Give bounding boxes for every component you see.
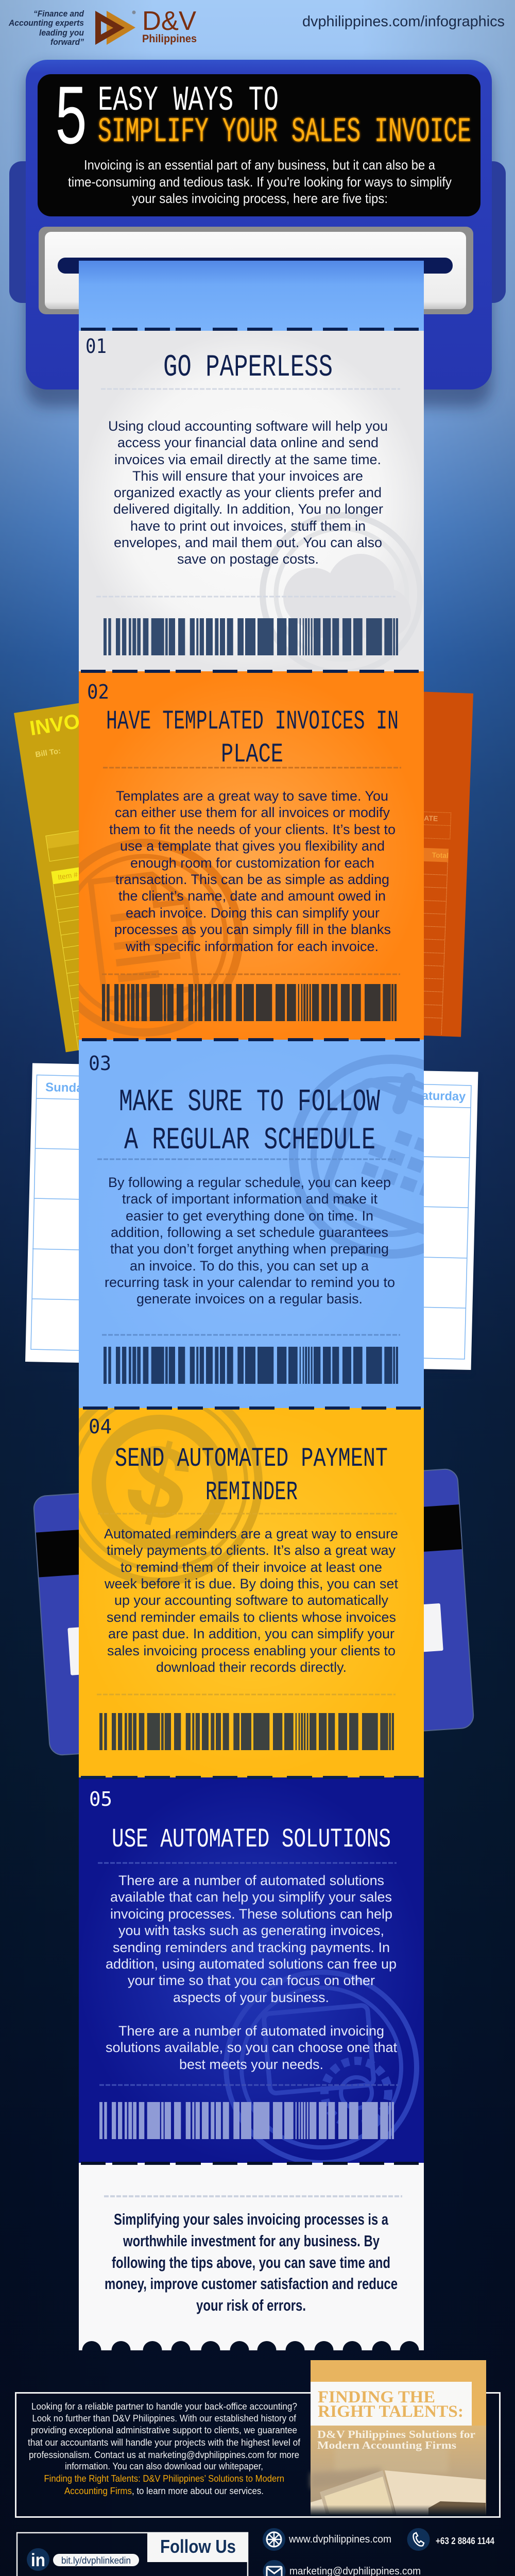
printer tray — [39, 227, 473, 314]
tip heading: HAVE TEMPLATED INVOICES IN — [106, 706, 399, 737]
promo text: that our accountants will handle your projects with the highest level of — [28, 2437, 301, 2448]
logo: D&V Philippines — [95, 6, 197, 45]
tip body text: sales invoicing process enabling your clients to — [107, 1643, 396, 1658]
promo text: professionalism. Contact us at marketing@dvphilippines.com for more — [29, 2450, 299, 2460]
tip body text: By following a regular schedule, you can keep — [108, 1175, 391, 1190]
tip body text: best meets your needs. — [179, 2057, 323, 2072]
intro text: your sales invoicing process, here are five tips: — [132, 191, 388, 206]
tip heading — [115, 1444, 388, 1507]
footer: contact website: www.dvphilippines.com — [288, 2534, 391, 2545]
conclusion text: Simplifying your sales invoicing processes is a — [114, 2210, 389, 2228]
footer: whitepaper book cover: RIGHT TALENTS: — [318, 2402, 464, 2421]
tip body text: aspects of your business. — [173, 1990, 329, 2005]
tip body text — [105, 1175, 395, 1307]
promo text: Look no further than D&V Philippines. With our established history of — [32, 2413, 297, 2424]
tip body text: week before it is due. By doing this, you can set — [104, 1576, 398, 1591]
tip heading: REMINDER — [205, 1477, 298, 1507]
tip 1 panel: go paperless — [79, 331, 424, 673]
tip body text — [109, 788, 396, 954]
follow us heading: Follow Us — [160, 2536, 236, 2557]
tip body text: you with tasks such as generating invoices, — [118, 1923, 384, 1938]
barcode — [102, 984, 397, 1021]
tip body text: timely payments to clients. It’s also a great way — [107, 1543, 396, 1558]
tip body text: each invoice. Doing this can simplify your — [126, 905, 380, 921]
title line 1: EASY WAYS TO — [98, 81, 279, 121]
footer: promo box — [15, 2393, 500, 2517]
tip body text: that you don’t forget anything when preparing — [110, 1241, 389, 1257]
tip heading: PLACE — [221, 739, 283, 770]
tip heading: USE AUTOMATED SOLUTIONS — [112, 1824, 391, 1855]
watermark: monitor and gear icon — [226, 1972, 417, 2163]
intro text: Invoicing is an essential part of any business, but it can also be a — [84, 157, 435, 173]
calendar sheet behind tip 3: Saturday — [414, 1089, 466, 1104]
promo text: Looking for a reliable partner to handle your back-office accounting? — [31, 2401, 297, 2412]
header: tagline: Accounting experts — [8, 18, 84, 28]
conclusion text: worthwhile investment for any business. By — [123, 2232, 380, 2250]
tip body text: them to fit the needs of your clients. It’s best to — [109, 822, 396, 837]
tip body text — [106, 1873, 397, 2072]
yellow invoice sheet behind tip 2: Bill To: — [35, 747, 61, 759]
tip body text: to remind them of their invoice at least one — [121, 1560, 382, 1575]
promo text — [28, 2401, 301, 2496]
footer: follow us box — [17, 2532, 248, 2576]
tip body text: processes as you can simply fill in the blanks — [114, 922, 391, 937]
tip body text: have to print out invoices, stuff them in — [130, 518, 366, 534]
tip body text: up your accounting software to automatically — [114, 1592, 388, 1608]
tip body text: organized exactly as your clients prefer and — [114, 485, 382, 500]
conclusion text: money, improve customer satisfaction and reduce — [105, 2275, 398, 2293]
tip body text: available that can help you simplify your sales — [110, 1889, 392, 1905]
tip body text: save on postage costs. — [177, 551, 319, 567]
footer: contact email — [263, 2560, 421, 2576]
tip body text: the client’s name, date and amount owed in — [118, 888, 386, 904]
intro text — [68, 157, 452, 206]
header: tagline: “Finance and — [33, 9, 84, 19]
tip body text: sending reminders and tracking payments. In — [113, 1940, 390, 1955]
tip heading: A REGULAR SCHEDULE — [124, 1123, 375, 1158]
book subtitle: D&V Philippines Solutions for — [317, 2428, 475, 2441]
header: tagline: forward” — [50, 37, 84, 47]
tip body text: can either use them for all invoices or modify — [115, 805, 390, 820]
barcode — [99, 1713, 394, 1750]
tip body text: access your financial data online and send — [117, 435, 379, 450]
scalloped tear edge — [82, 2341, 419, 2350]
orange invoice sheet behind tip 2 — [322, 688, 473, 1037]
tip body text: send reminder emails to clients whose invoices — [107, 1609, 396, 1625]
tip body text: Templates are a great way to save time. You — [116, 788, 388, 804]
tip body text: download their records directly. — [156, 1659, 347, 1675]
footer: contact website — [263, 2528, 391, 2551]
tip 5 panel: automated solutions — [79, 1777, 424, 2163]
promo text: information. You can also download our whitepaper, — [65, 2461, 263, 2471]
tip body text: This will ensure that your invoices are — [132, 468, 363, 484]
header: tagline — [8, 9, 84, 47]
tip body text: your time so that you can focus on other — [128, 1973, 375, 1988]
tip body text: an invoice. To do this, you can set up a — [130, 1258, 369, 1274]
tip body text — [108, 418, 388, 567]
perforation dashes between panels — [81, 328, 421, 2165]
tip number: 04 — [89, 1415, 112, 1438]
promo text: , to learn more about our services. — [132, 2486, 264, 2496]
tip number: 01 — [85, 335, 107, 358]
logo: D&V Philippines: D&V — [142, 6, 196, 36]
paper roll: top blue end — [79, 261, 424, 331]
tip number: 02 — [87, 681, 109, 703]
tip heading: MAKE SURE TO FOLLOW — [119, 1085, 380, 1120]
tip heading: GO PAPERLESS — [163, 350, 333, 385]
tip body text: generate invoices on a regular basis. — [136, 1291, 363, 1307]
header: website url: dvphilippines.com/infographics — [302, 13, 505, 30]
tip number: 03 — [89, 1052, 111, 1075]
tip body text: Automated reminders are a great way to ensure — [104, 1526, 398, 1541]
tip body text: delivered digitally. In addition, You no longer — [113, 501, 383, 517]
tip body text: There are a number of automated solutions — [118, 1873, 384, 1888]
tip body text: invoices via email directly at the same time. — [114, 452, 381, 467]
icon: linkedin — [27, 2548, 49, 2571]
conclusion text: your risk of errors. — [196, 2296, 306, 2314]
tip body text: use a template that gives you flexibility and — [120, 838, 385, 854]
credit card behind tip 4 — [33, 1468, 474, 1756]
title number 5: 5 — [54, 72, 88, 169]
tip body text: recurring task in your calendar to remind you to — [105, 1275, 395, 1290]
promo text: Finding the Right Talents: D&V Philippines’ Solutions to Modern — [44, 2473, 284, 2484]
footer: whitepaper book cover: Modern Accounting Firms — [317, 2439, 456, 2451]
yellow invoice sheet behind tip 2 — [14, 682, 269, 1052]
tip 3 panel: regular schedule — [79, 1040, 424, 1408]
barcode — [99, 2102, 394, 2139]
printer machine — [9, 60, 506, 407]
header: tagline: leading you — [39, 28, 84, 38]
tip body text: invoicing processes. These solutions can help — [110, 1906, 392, 1922]
watermark: dollar coin icon — [79, 1408, 263, 1586]
tip body text: Using cloud accounting software will help you — [108, 418, 388, 434]
tip body text: envelopes, and mail them out. You can also — [114, 535, 382, 550]
calendar sheet behind tip 3 — [25, 1063, 478, 1374]
promo text: providing exceptional administrative support to clients, we guarantee — [31, 2425, 297, 2435]
conclusion panel — [79, 2163, 424, 2350]
footer: contact phone — [407, 2528, 494, 2551]
orange invoice sheet behind tip 2: DATE — [419, 814, 438, 823]
tip body text: easier to get everything done on time. In — [126, 1208, 373, 1224]
linkedin link pill: bit.ly/dvphlinkedin — [61, 2555, 131, 2566]
tip body text: solutions available, so you can choose one that — [106, 2040, 397, 2055]
tip body text: addition, following a set schedule guarantees — [111, 1225, 388, 1240]
intro text: time-consuming and tedious task. If you're looking for ways to simplify — [68, 174, 452, 190]
tip body text: with specific information for each invoice. — [125, 939, 379, 954]
tip body text: are past due. In addition, you can simplify your — [108, 1626, 394, 1641]
tip heading: SEND AUTOMATED PAYMENT — [115, 1444, 388, 1474]
barcode — [104, 1347, 398, 1384]
tip body text: addition, using automated solutions can free up — [106, 1956, 397, 1972]
tip heading — [119, 1085, 380, 1158]
tip heading — [106, 706, 399, 770]
watermark: cloud icon — [263, 515, 420, 673]
watermark: calendar icon — [289, 1055, 424, 1259]
tip 2 panel: templated invoices — [49, 671, 424, 1040]
tip body text — [104, 1526, 398, 1675]
tip body text: There are a number of automated invoicing — [118, 2023, 384, 2039]
tip body text: transaction. This can be as simple as adding — [115, 872, 389, 887]
barcode — [104, 618, 398, 655]
logo: D&V Philippines: Philippines — [142, 33, 197, 45]
conclusion text — [105, 2210, 398, 2314]
orange invoice sheet behind tip 2: Total — [432, 851, 449, 859]
tip body text: enough room for customization for each — [130, 855, 374, 871]
yellow invoice sheet behind tip 2: INVOICE — [28, 705, 115, 740]
tip number: 05 — [89, 1788, 112, 1810]
book title: FINDING THE — [318, 2388, 435, 2406]
watermark: dollar coin icon: $ — [115, 1417, 202, 1547]
yellow invoice sheet behind tip 2: Item # — [57, 870, 78, 882]
icon: linkedin: in — [31, 2550, 45, 2570]
conclusion text: following the tips above, you can save time and — [112, 2253, 390, 2272]
printer screen title panel — [38, 72, 480, 216]
tip 4 panel: payment reminder — [79, 1408, 424, 1777]
calendar sheet behind tip 3: Sunday — [45, 1080, 91, 1095]
tip body text: track of important information and make it — [122, 1191, 377, 1207]
footer: contact phone: +63 2 8846 1144 — [436, 2536, 494, 2546]
footer: whitepaper book cover — [311, 2360, 486, 2516]
watermark: document icon — [49, 843, 239, 1032]
promo text: Accounting Firms — [64, 2486, 132, 2496]
